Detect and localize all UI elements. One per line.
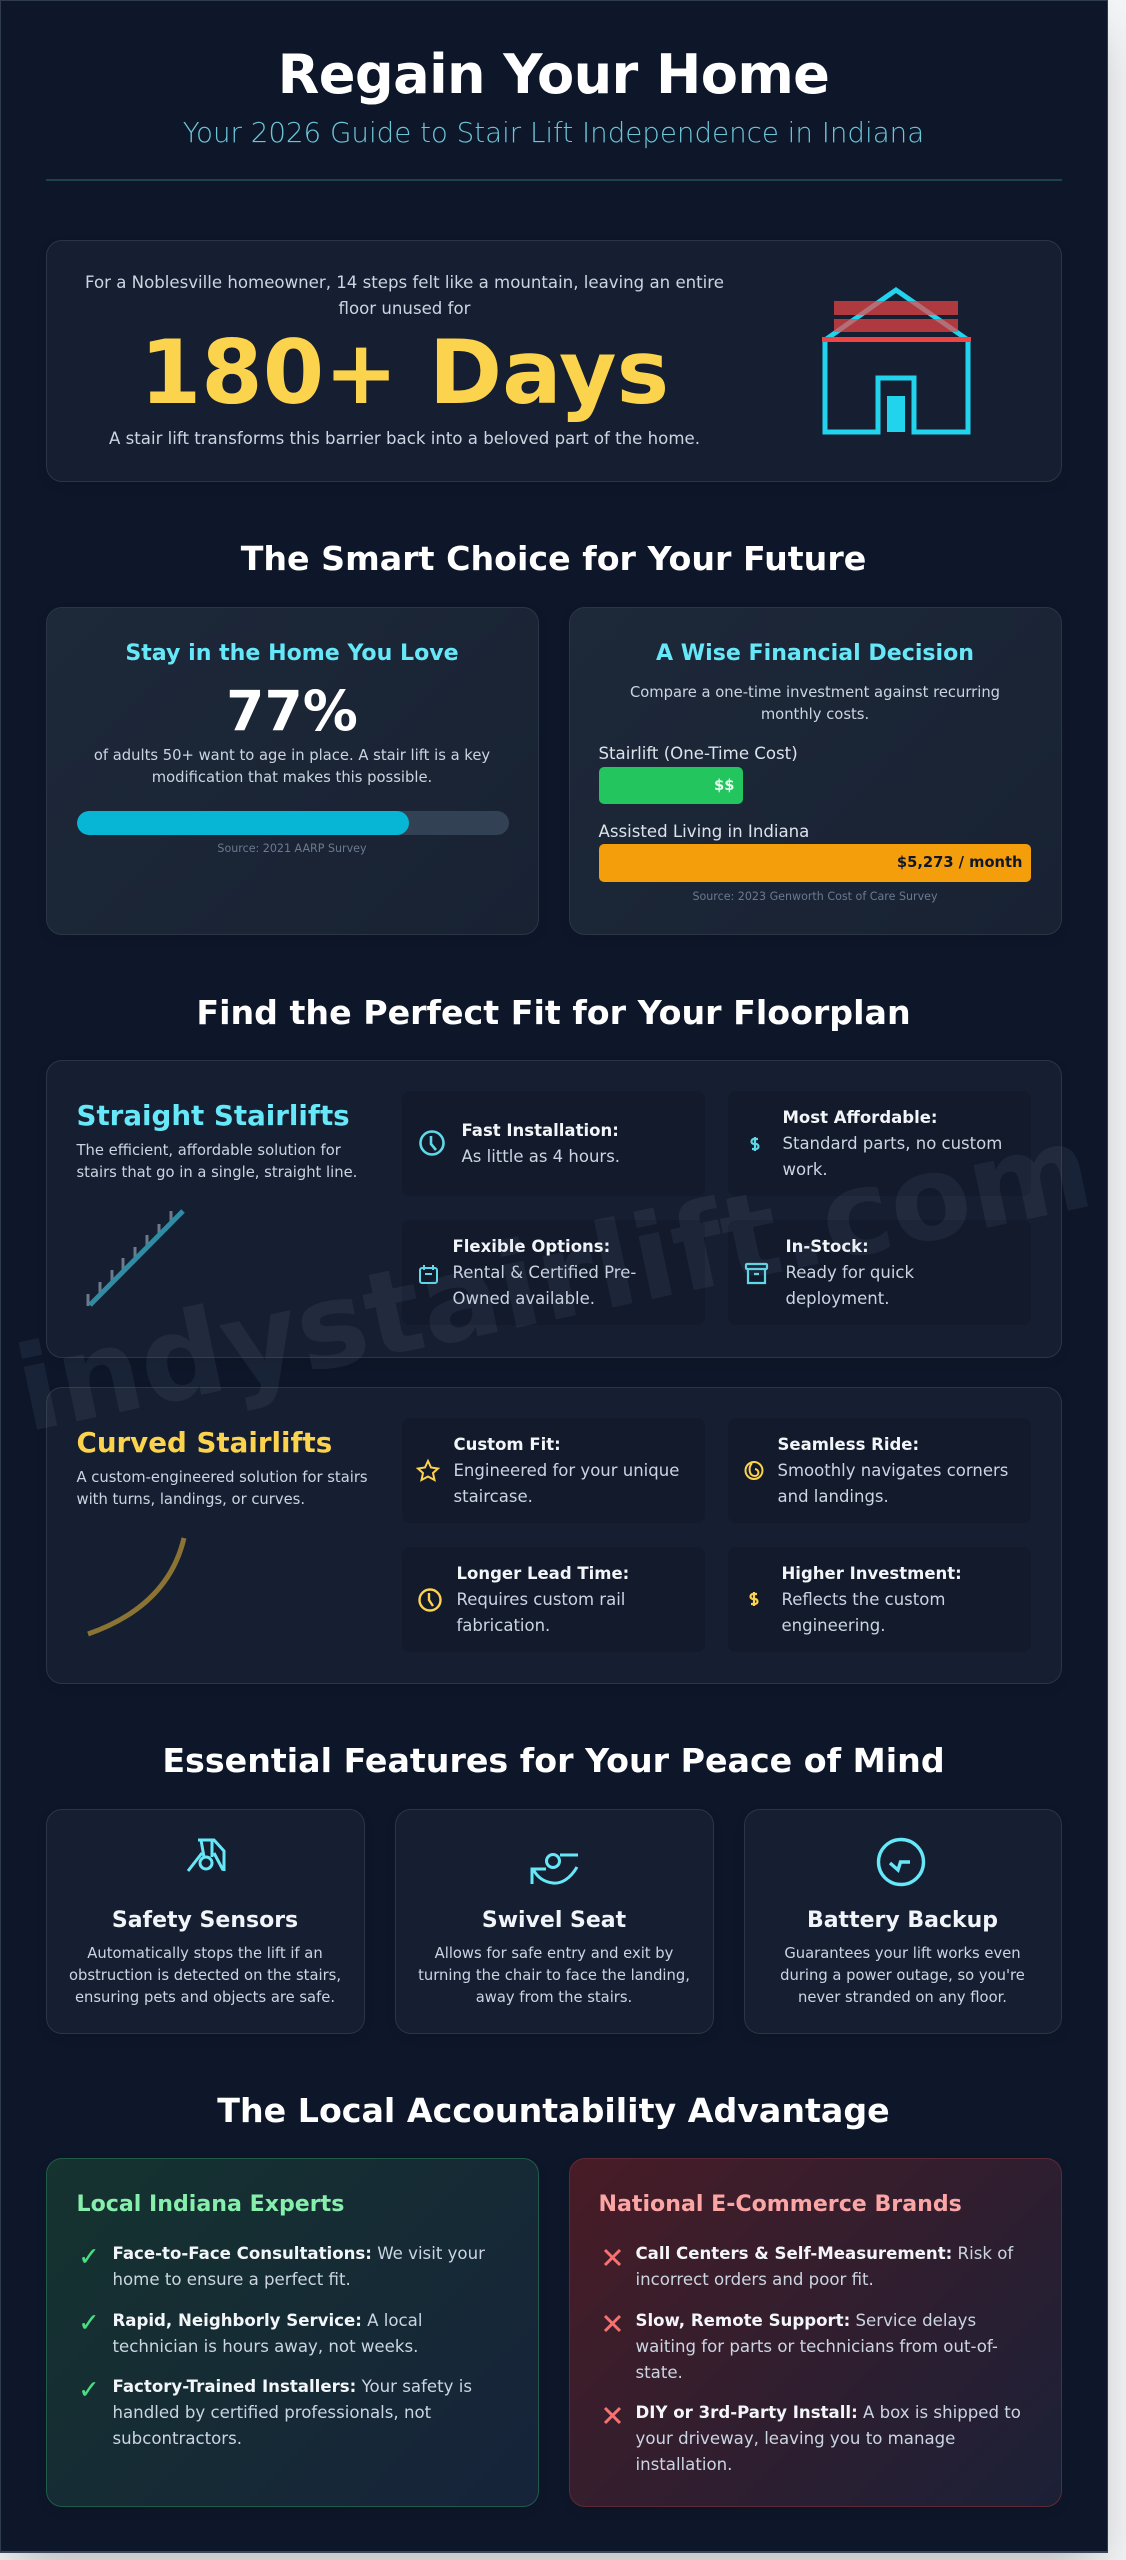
icon: calendar <box>419 1265 438 1284</box>
icon: dollar <box>749 1592 759 1606</box>
card description: Compare a one-time investment against recurring <box>630 684 1000 700</box>
heading: essential features: Essential Features for Your Peace of Mind <box>162 1740 945 1780</box>
bar: stairlift cost: $$ <box>714 776 734 794</box>
item: subcontractors. <box>112 2428 242 2448</box>
feature description <box>418 1944 690 2006</box>
watermark: indystairlift.com <box>4 1097 1102 1459</box>
item <box>112 2244 485 2288</box>
icon: straight rail <box>86 1209 185 1307</box>
big stat: 180+ Days: 180+ Days <box>140 320 669 424</box>
item: state. <box>636 2362 683 2382</box>
item: Call Centers & Self-Measurement: Risk of <box>636 2244 1013 2262</box>
feature description: ensuring pets and objects are safe. <box>75 1988 335 2006</box>
card description: monthly costs. <box>761 706 869 722</box>
heading: smart choice: The Smart Choice for Your Future <box>241 538 866 578</box>
feature text: Custom Fit: <box>454 1434 561 1454</box>
feature text <box>786 1236 914 1308</box>
hero intro text <box>85 272 724 318</box>
panel description: with turns, landings, or curves. <box>76 1490 305 1508</box>
feature text: Standard parts, no custom <box>782 1134 1002 1152</box>
icon: swivel <box>530 1853 578 1885</box>
feature text: deployment. <box>786 1288 889 1308</box>
feature description: Guarantees your lift works even <box>784 1944 1021 1962</box>
feature description <box>69 1944 341 2006</box>
panel description <box>76 1468 368 1508</box>
bar: assisted living cost: $5,273 / month <box>897 854 1022 870</box>
feature: fast installation <box>402 1090 704 1196</box>
icon: battery <box>876 1838 926 1886</box>
label: stairlift: Stairlift (One-Time Cost) <box>598 744 798 762</box>
item: home to ensure a perfect fit. <box>112 2270 351 2288</box>
card title: Stay in the Home You Love <box>125 640 459 666</box>
cross mark <box>604 2315 621 2332</box>
panel heading: Curved Stairlifts <box>76 1426 332 1458</box>
feature description: obstruction is detected on the stairs, <box>69 1966 341 1984</box>
hero intro text: For a Noblesville homeowner, 14 steps felt like a mountain, leaving an entire <box>85 272 724 292</box>
panel heading: Local Indiana Experts <box>76 2190 344 2216</box>
cross mark <box>604 2407 621 2424</box>
item <box>112 2376 472 2448</box>
icon: safety sensor <box>186 1838 226 1872</box>
item: your driveway, leaving you to manage <box>636 2428 955 2448</box>
icon: box <box>744 1262 768 1284</box>
feature text: engineering. <box>782 1616 885 1634</box>
bar: stairlift cost <box>598 766 742 804</box>
feature text: Higher Investment: <box>782 1564 962 1582</box>
icon: clock <box>418 1588 442 1612</box>
icon: house with blocked upper floor <box>822 287 971 434</box>
item: Rapid, Neighborly Service: A local <box>112 2310 422 2330</box>
feature title: Swivel Seat <box>482 1908 626 1932</box>
icon: dollar <box>750 1137 760 1151</box>
feature description: Allows for safe entry and exit by <box>435 1944 673 1962</box>
feature: flexible options <box>402 1220 704 1324</box>
feature title: Battery Backup <box>807 1908 998 1932</box>
feature text: Engineered for your unique <box>454 1460 679 1480</box>
title: Regain Your Home <box>278 42 829 106</box>
feature: seamless ride <box>728 1418 1030 1522</box>
panel heading: National E-Commerce Brands <box>598 2190 962 2216</box>
feature text <box>778 1434 1008 1506</box>
icon: curved rail <box>87 1537 186 1636</box>
panel: financial decision <box>568 606 1062 934</box>
check mark: ✓ <box>78 2242 99 2270</box>
item <box>636 2310 998 2382</box>
feature: higher investment <box>728 1546 1030 1652</box>
feature description: away from the stairs. <box>476 1988 632 2006</box>
stat: 77%: 77% <box>226 678 358 742</box>
panel description: A custom-engineered solution for stairs <box>76 1468 368 1486</box>
check mark: ✓ <box>78 2308 99 2336</box>
feature text: Smoothly navigates corners <box>778 1460 1008 1480</box>
item <box>636 2244 1014 2288</box>
heading: perfect fit: Find the Perfect Fit for Your Floorplan <box>196 992 911 1032</box>
panel description <box>76 1142 357 1180</box>
panel: curved stairlifts <box>46 1386 1062 1684</box>
feature text: Longer Lead Time: <box>456 1564 629 1582</box>
feature description: during a power outage, so you're <box>780 1966 1025 1984</box>
panel heading: Straight Stairlifts <box>76 1098 350 1132</box>
item <box>636 2402 1021 2474</box>
hero closing text: A stair lift transforms this barrier back into a beloved part of the home. <box>109 428 700 448</box>
feature text: Seamless Ride: <box>778 1434 919 1454</box>
feature: custom fit <box>402 1418 704 1522</box>
feature description: Automatically stops the lift if an <box>87 1944 323 1962</box>
feature text: Rental & Certified Pre- <box>452 1262 636 1282</box>
feature text: Ready for quick <box>786 1262 914 1282</box>
bar: assisted living cost <box>598 844 1030 882</box>
item: DIY or 3rd-Party Install: A box is shipped to <box>636 2402 1021 2422</box>
panel: safety sensors <box>46 1808 364 2034</box>
feature description: turning the chair to face the landing, <box>418 1966 690 1984</box>
feature description <box>780 1944 1025 2006</box>
feature text: staircase. <box>454 1486 533 1506</box>
feature title: Safety Sensors <box>112 1908 298 1932</box>
source note: Source: 2023 Genworth Cost of Care Survey <box>692 890 938 902</box>
item: waiting for parts or technicians from out-of- <box>636 2336 998 2356</box>
feature text <box>454 1434 679 1506</box>
icon: clock <box>419 1130 445 1156</box>
item: incorrect orders and poor fit. <box>636 2270 874 2288</box>
stat description <box>94 746 490 786</box>
feature text <box>462 1120 620 1166</box>
hero intro text: floor unused for <box>339 298 470 318</box>
feature text: and landings. <box>778 1486 889 1506</box>
panel: swivel seat <box>394 1808 714 2034</box>
feature text: Most Affordable: <box>782 1108 938 1126</box>
feature text: Reflects the custom <box>782 1590 945 1608</box>
feature text: Flexible Options: <box>452 1236 610 1256</box>
cross mark <box>604 2249 621 2266</box>
feature text: As little as 4 hours. <box>462 1146 620 1166</box>
feature: in-stock <box>728 1220 1030 1324</box>
check mark: ✓ <box>78 2374 99 2404</box>
label: assisted living: Assisted Living in Indiana <box>598 822 809 840</box>
feature text: Owned available. <box>452 1288 595 1308</box>
item: technician is hours away, not weeks. <box>112 2336 418 2356</box>
panel description: The efficient, affordable solution for <box>76 1142 341 1158</box>
feature text <box>782 1108 1002 1178</box>
stat description: of adults 50+ want to age in place. A stair lift is a key <box>94 746 490 764</box>
panel: local experts <box>46 2158 538 2506</box>
panel: hero <box>46 240 1062 482</box>
item: handled by certified professionals, not <box>112 2402 431 2422</box>
stat description: modification that makes this possible. <box>152 768 432 786</box>
progress fill <box>76 810 408 834</box>
item: Face-to-Face Consultations: We visit your <box>112 2244 485 2262</box>
feature: longer lead time <box>402 1546 704 1652</box>
icon: star <box>416 1458 440 1482</box>
panel: straight stairlifts <box>46 1060 1062 1358</box>
item: Factory-Trained Installers: Your safety is <box>112 2376 472 2396</box>
feature text: fabrication. <box>456 1616 550 1634</box>
heading: local advantage: The Local Accountability Advantage <box>217 2090 890 2130</box>
panel: national brands <box>568 2158 1062 2506</box>
item: Slow, Remote Support: Service delays <box>636 2310 976 2330</box>
feature text: In-Stock: <box>786 1236 869 1256</box>
feature text: work. <box>782 1160 828 1178</box>
subtitle: Your 2026 Guide to Stair Lift Independence in Indiana <box>183 116 924 148</box>
feature text: Requires custom rail <box>456 1590 625 1608</box>
item: installation. <box>636 2454 732 2474</box>
card description <box>630 684 1000 722</box>
feature text <box>782 1564 962 1634</box>
feature text <box>456 1564 629 1634</box>
card title: A Wise Financial Decision <box>656 640 974 666</box>
feature text <box>452 1236 636 1308</box>
icon: spiral <box>744 1461 764 1480</box>
panel description: stairs that go in a single, straight line. <box>76 1164 357 1180</box>
feature description: never stranded on any floor. <box>798 1988 1007 2006</box>
progress bar 77% <box>76 810 508 834</box>
panel: stay in the home <box>46 606 538 934</box>
feature: most affordable <box>728 1090 1030 1196</box>
item <box>112 2310 422 2356</box>
source note: Source: 2021 AARP Survey <box>217 842 367 854</box>
feature text: Fast Installation: <box>462 1120 619 1140</box>
panel: battery backup <box>744 1808 1062 2034</box>
